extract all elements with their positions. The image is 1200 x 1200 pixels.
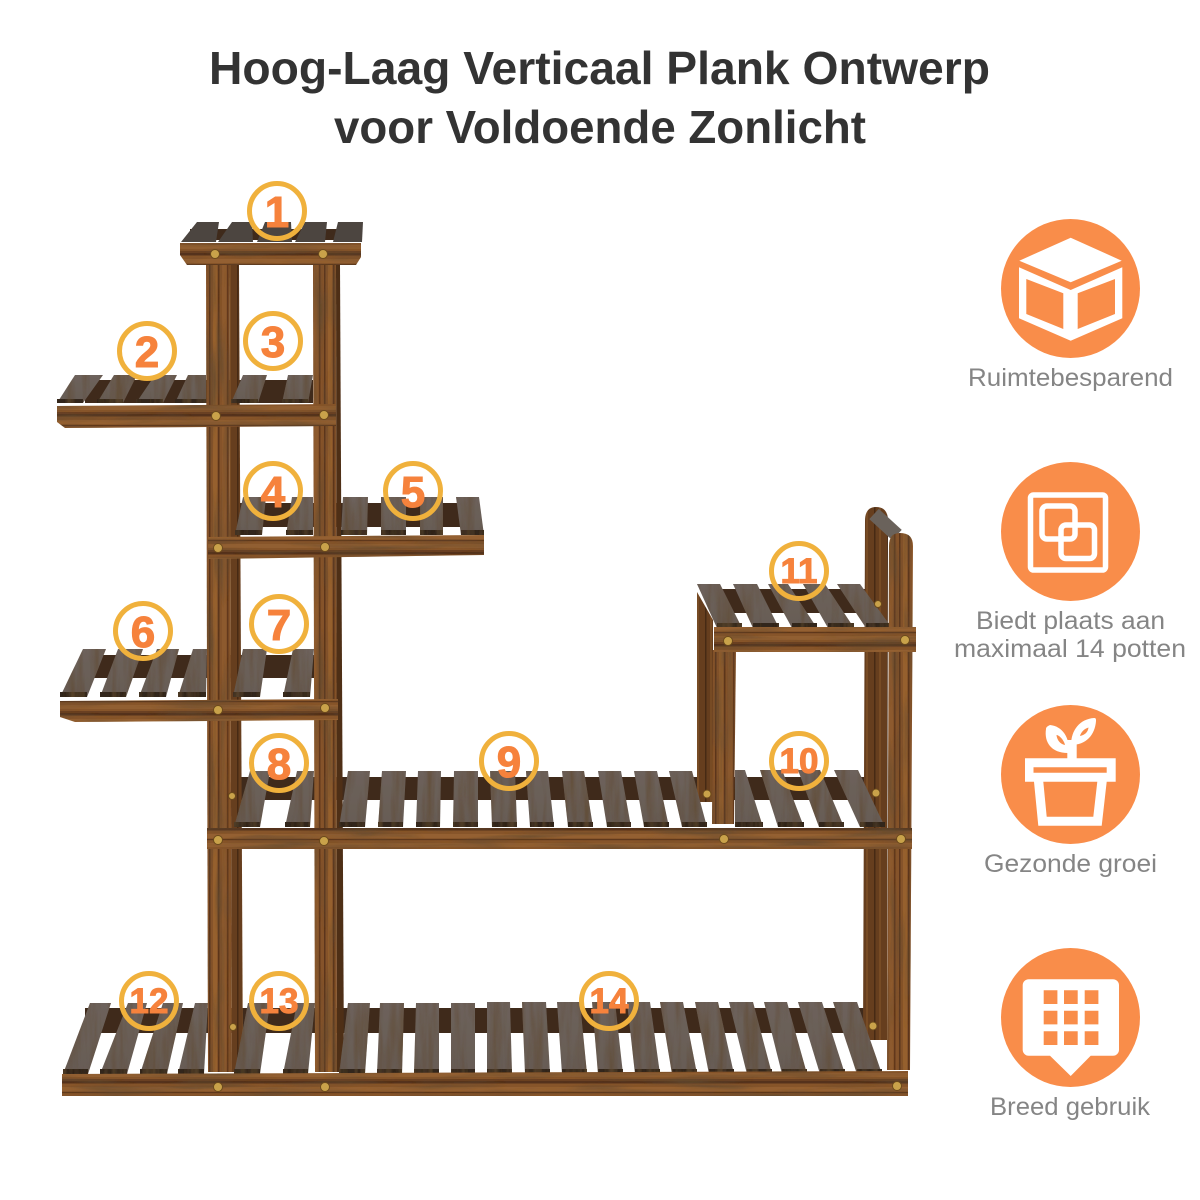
back rails under the slats xyxy=(85,229,880,1033)
badge numbers: 10 xyxy=(780,742,818,781)
icon: overlapping squares xyxy=(1001,462,1140,601)
badge 14 xyxy=(582,974,636,1028)
icon: grid speech bubble xyxy=(1001,948,1140,1087)
slats: positions 12, 13 and 14 xyxy=(63,1002,882,1074)
screws xyxy=(210,250,910,1092)
badge 6 xyxy=(116,604,170,658)
label: Biedt plaats aan maximaal 14 potten: maximaal 14 potten xyxy=(954,635,1186,663)
back posts xyxy=(229,265,897,1072)
label: Biedt plaats aan maximaal 14 potten: Biedt plaats aan xyxy=(976,607,1165,635)
badge 9 xyxy=(482,734,536,788)
badge 2 xyxy=(120,324,174,378)
badge numbers: 11 xyxy=(780,552,818,591)
slats: position 11 xyxy=(697,584,892,628)
badge numbers xyxy=(130,188,818,1021)
badge numbers: 13 xyxy=(260,982,298,1021)
slats: positions 2 and 3 xyxy=(57,375,313,403)
badge 12 xyxy=(122,974,176,1028)
badge 11 xyxy=(772,544,826,598)
badge 8 xyxy=(252,736,306,790)
slats: top shelf position 1 xyxy=(181,222,363,242)
icon: plant pot xyxy=(1001,705,1140,844)
front posts xyxy=(206,265,913,1072)
title xyxy=(209,42,990,153)
icon: box xyxy=(1001,219,1140,358)
feature: holds up to 14 pots xyxy=(954,462,1186,663)
number badges on the shelf xyxy=(116,184,826,1028)
badge numbers: 4 xyxy=(261,468,286,517)
badge numbers: 6 xyxy=(131,608,155,657)
slats: positions 4 and 5 xyxy=(235,497,484,535)
badge 5 xyxy=(386,464,440,518)
label: Gezonde groei: Gezonde groei xyxy=(984,850,1157,878)
badge numbers: 5 xyxy=(401,468,425,517)
feature: healthy growth xyxy=(984,705,1157,878)
badge 7 xyxy=(252,596,306,652)
badge numbers: 7 xyxy=(267,601,291,650)
slats: positions 8, 9 and 10 xyxy=(234,770,885,827)
badge numbers: 1 xyxy=(265,188,289,237)
feature: wide use xyxy=(990,948,1151,1121)
badge 1 xyxy=(250,184,304,238)
title: Hoog-Laag Verticaal Plank Ontwerp xyxy=(209,42,990,94)
badge 10 xyxy=(772,734,826,788)
label: Ruimtebesparend: Ruimtebesparend xyxy=(968,364,1173,392)
badge 4 xyxy=(246,464,300,518)
badge numbers: 9 xyxy=(497,738,521,787)
wooden plant shelf with 14 positions xyxy=(57,222,916,1096)
badge numbers: 2 xyxy=(135,328,159,377)
badge numbers: 8 xyxy=(267,740,291,789)
title: voor Voldoende Zonlicht xyxy=(334,101,866,153)
badge numbers: 12 xyxy=(130,982,168,1021)
badge numbers: 14 xyxy=(590,982,629,1021)
slats: positions 6 and 7 xyxy=(60,649,314,697)
badge 13 xyxy=(252,974,306,1028)
label: Breed gebruik: Breed gebruik xyxy=(990,1093,1151,1121)
badge 3 xyxy=(246,314,300,368)
badge numbers: 3 xyxy=(261,318,285,367)
feature: space saving xyxy=(968,219,1173,392)
label: Biedt plaats aan maximaal 14 potten xyxy=(954,607,1186,663)
front beams xyxy=(57,243,916,1096)
